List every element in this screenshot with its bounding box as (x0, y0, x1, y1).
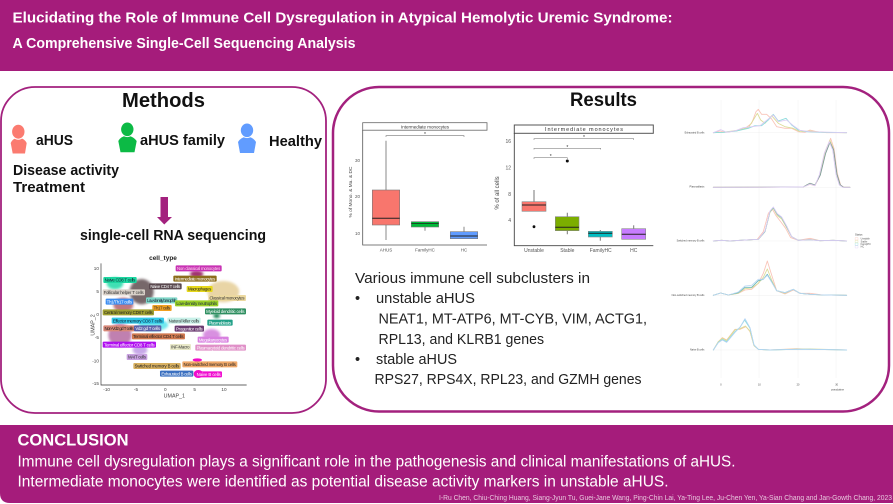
chart: UMAP cell types: -10 (92, 358, 99, 363)
chart: boxplot intermediate monocytes by group: % of Mono. & Ma. & DC (348, 166, 354, 217)
cluster labels: Th17 cells (154, 306, 170, 311)
label: aHUS family: aHUS family (140, 133, 225, 149)
chart: UMAP cell types: UMAP_1 (164, 393, 185, 399)
legend: status: FamilyHC (861, 244, 871, 246)
chart: boxplot intermediate monocytes by disease status: 16 (505, 139, 511, 145)
text: disease activity and treatment (13, 163, 119, 196)
header banner with title: Elucidating the Role of Immune Cell Dysregulation in Atypical Hemolytic Uremic Syndrome: (12, 10, 672, 26)
legend: status: HC (861, 247, 864, 249)
chart: boxplot intermediate monocytes by disease status: Unstable (524, 248, 544, 254)
chart: UMAP cell types: -10 (103, 387, 110, 392)
cluster labels: Naive B cells (197, 372, 221, 377)
cluster labels: Naive CD8 T cells (105, 278, 135, 283)
chart: UMAP cell types: 5 (96, 289, 99, 294)
arrow: down to sequencing (157, 197, 172, 224)
chart: boxplot intermediate monocytes by group: * (424, 132, 426, 138)
cluster labels: Plasmacytoid dendritic cells (197, 345, 245, 350)
heading: conclusion: CONCLUSION (18, 430, 128, 450)
chart: boxplot intermediate monocytes by group: HC (461, 248, 468, 252)
chart: pseudotime ridgelines (672, 100, 871, 391)
chart: UMAP cell types: 5 (193, 387, 196, 392)
cluster labels: Effector memory CD8 T cells (113, 318, 162, 323)
cluster labels (103, 265, 246, 377)
legend: status: Stable (861, 240, 868, 243)
heading: results: Results (570, 90, 637, 111)
cluster labels: Terminal effector CD8 T cells (104, 342, 155, 347)
pseudotime axis: pseudotime (831, 388, 845, 391)
chart: boxplot intermediate monocytes by disease status: Intermediate monocytes (545, 127, 623, 133)
text block: gene findings: RPL13, and KLRB1 genes (378, 332, 544, 348)
text block: gene findings: RPS27, RPS4X, RPL23, and GZMH genes (374, 372, 642, 388)
chart: UMAP cell types: -15 (92, 381, 99, 386)
cluster labels: Follicular helper T cells (104, 290, 144, 295)
cluster labels: Vd2 gd T cells (135, 326, 160, 331)
ridge labels: Naive B cells (690, 348, 705, 351)
axes (101, 263, 247, 385)
ridge: non-switched memory B cells (713, 261, 847, 295)
icon: aHUS person (11, 124, 27, 154)
cluster labels: Macrophages (188, 287, 211, 292)
chart: UMAP cell types: 10 (221, 387, 227, 392)
text: conclusion statements: Immune cell dysregulation plays a significant role in the pathogenesis and clinical manifestations of aHUS. (18, 454, 736, 470)
text block: gene findings: Various immune cell subclusters in (355, 271, 590, 287)
ridge labels: Switched memory B cells (677, 240, 705, 243)
chart: boxplot intermediate monocytes by disease status: FamilyHC (590, 248, 612, 254)
icon: healthy person (238, 123, 256, 153)
header banner with title (0, 0, 893, 71)
chart: UMAP cell types: 0 (164, 387, 167, 392)
heading: methods: Methods (122, 90, 205, 112)
cluster labels: Exhausted B cells (161, 371, 192, 376)
chart: UMAP cell types: 0 (96, 312, 99, 317)
icon: aHUS family person (118, 122, 137, 152)
chart: boxplot intermediate monocytes by disease status: 8 (508, 192, 511, 198)
chart: boxplot intermediate monocytes by disease status: 4 (508, 218, 511, 224)
ridge: exhausted B cells (713, 109, 847, 133)
legend: status: Unstable (861, 238, 871, 241)
text: conclusion statements (18, 454, 736, 490)
ridge: switched memory B cells (713, 207, 847, 241)
cluster labels: Megakaryocytes (199, 337, 227, 342)
cluster labels: Classical monocytes (209, 296, 244, 301)
chart: UMAP cell types: -5 (134, 387, 138, 392)
cluster labels: Non-switched memory B cells (183, 362, 236, 367)
ridge labels: Non-switched memory B cells (672, 294, 705, 297)
chart: boxplot intermediate monocytes by disease status: Stable (560, 248, 575, 254)
ridge labels (677, 131, 705, 243)
ridge: naive B cells (713, 319, 847, 350)
chart: boxplot intermediate monocytes by group: 10 (355, 231, 360, 236)
text block: gene findings (355, 271, 647, 388)
cluster labels: INF-Macro (171, 345, 190, 350)
cluster labels: Progenitor cells (176, 326, 203, 331)
text: conclusion statements: Intermediate monocytes were identified as potential disease activity markers in unstable aHUS. (18, 474, 668, 490)
label: single-cell RNA sequencing: single-cell RNA sequencing (80, 228, 266, 244)
chart: boxplot intermediate monocytes by group: FamilyHC (415, 248, 436, 252)
ridge labels: Exhausted B cells (685, 131, 705, 134)
text: disease activity and treatment: Treatment (13, 180, 85, 196)
panel: results (333, 87, 889, 412)
header banner with title: A Comprehensive Single-Cell Sequencing Analysis (12, 36, 356, 52)
cluster labels: Intermediate monocytes (175, 276, 215, 281)
chart: UMAP cell types: -5 (95, 335, 99, 340)
text block: gene findings: • (355, 291, 360, 307)
text block: gene findings: NEAT1, MT-ATP6, MT-CYB, VIM, ACTG1, (378, 312, 647, 328)
chart: boxplot intermediate monocytes by disease status: HC (630, 248, 638, 254)
ridge: plasmablasts (713, 138, 850, 187)
chart: boxplot intermediate monocytes by group: 20 (355, 194, 360, 199)
cluster labels: Low-density neutrophils (176, 301, 217, 306)
legend: status (855, 232, 871, 249)
ridge labels: Plasmablasts (690, 185, 705, 188)
ridge labels (672, 294, 705, 351)
pseudotime axis: 20 (797, 384, 800, 387)
text: disease activity and treatment: Disease activity (13, 163, 119, 179)
cluster labels: Non-Vd2 gd T cells (104, 326, 133, 331)
pseudotime axis: 0 (720, 384, 722, 387)
text block: gene findings: • (355, 352, 360, 368)
cluster blobs (107, 271, 239, 355)
panel: conclusion banner (0, 425, 893, 503)
cluster labels: Th1/Th17 cells (107, 299, 132, 304)
cluster labels: Non classical monocytes (177, 266, 220, 271)
chart: boxplot intermediate monocytes by group: 30 (355, 158, 360, 163)
chart: boxplot intermediate monocytes by disease status: % of all cells (495, 176, 501, 210)
legend: status: Status (855, 232, 863, 236)
cluster labels: Natural killer cells (169, 318, 199, 323)
chart: boxplot intermediate monocytes by group: AHUS (380, 248, 392, 252)
pseudotime axis: 30 (835, 384, 839, 387)
cluster labels: Low-density basophils (147, 298, 176, 303)
cluster labels: Switched memory B cells (135, 364, 179, 369)
chart: UMAP cell types: 10 (94, 266, 99, 271)
chart: boxplot intermediate monocytes by disease status: * (566, 145, 568, 151)
panel: methods (1, 87, 326, 413)
cluster labels: Central memory CD8 T cells (104, 310, 153, 315)
pseudotime axis: 10 (758, 384, 761, 387)
cluster labels: Terminal effector CD4 T cells (133, 334, 183, 339)
chart: UMAP cell types: cell_type (149, 255, 177, 262)
chart: boxplot intermediate monocytes by group: Intermediate monocytes (401, 124, 450, 130)
chart: boxplot intermediate monocytes by group (348, 123, 487, 252)
chart: boxplot intermediate monocytes by disease status: * (583, 135, 585, 141)
text block: gene findings: stable aHUS (376, 352, 457, 368)
cluster labels: Myeloid dendritic cells (206, 309, 244, 314)
cluster labels: MAIT cells (128, 355, 146, 360)
label: aHUS: aHUS (36, 133, 73, 149)
chart: UMAP cell types: UMAP_2 (91, 314, 97, 336)
label: healthy: Healthy (269, 134, 322, 150)
pseudotime axis (720, 384, 845, 391)
chart: boxplot intermediate monocytes by disease status (495, 125, 653, 254)
chart: boxplot intermediate monocytes by disease status: 12 (505, 166, 511, 172)
cluster labels: Naive CD4 T cells (150, 284, 180, 289)
text block: gene findings: unstable aHUS (376, 291, 475, 307)
chart: UMAP cell types (91, 255, 247, 399)
chart: boxplot intermediate monocytes by disease status: * (550, 154, 552, 160)
cluster labels: Plasmablasts (209, 320, 231, 325)
